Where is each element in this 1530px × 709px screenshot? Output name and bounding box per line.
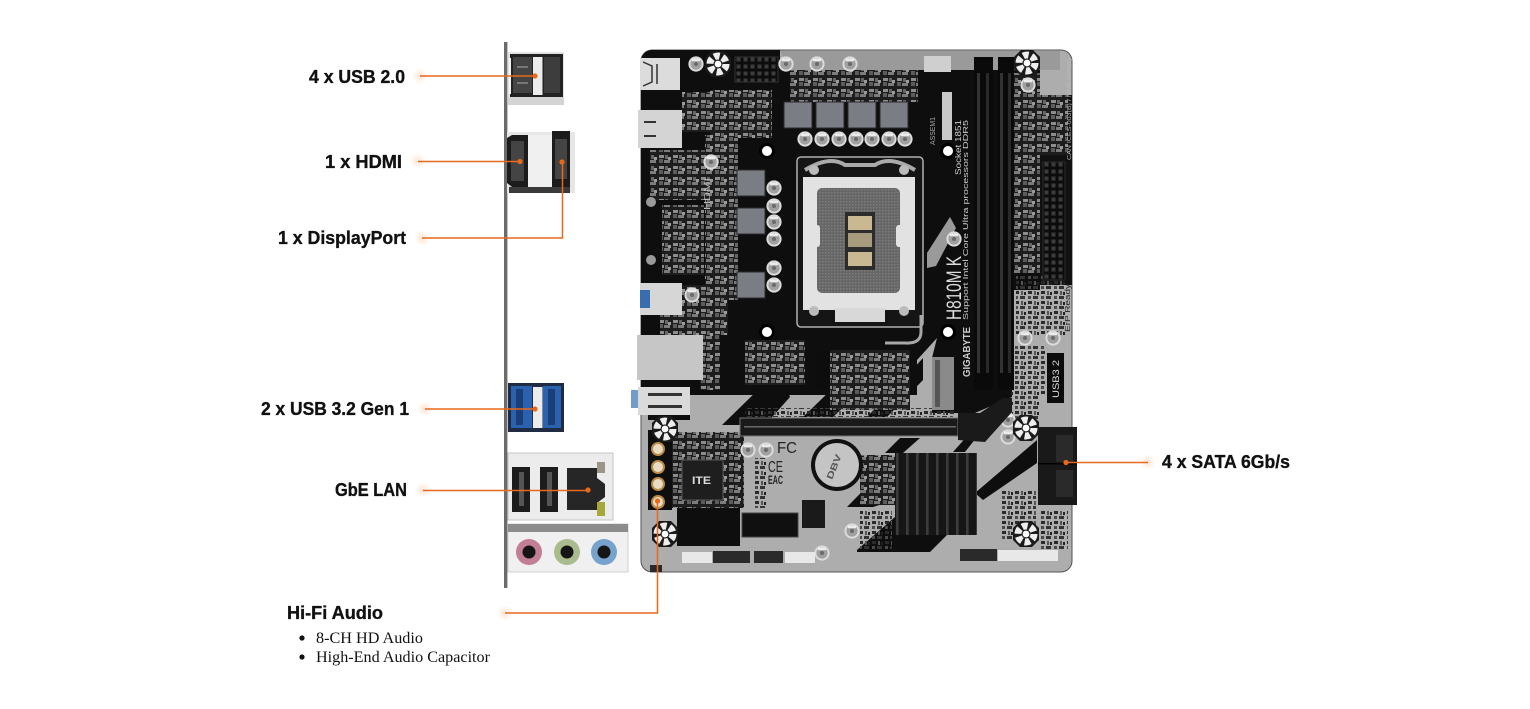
board silkscreen text: HDMI	[703, 178, 712, 210]
icon: HDMI and DisplayPort connectors	[507, 131, 575, 193]
LAN connector on board	[637, 335, 703, 380]
board silkscreen text: USB3 2	[1051, 360, 1061, 398]
falcon logo shape	[927, 217, 956, 268]
label: 4 x SATA 6Gb/s: 4 x SATA 6Gb/s	[1162, 451, 1290, 472]
small white holes	[646, 143, 956, 340]
board silkscreen text: DBV	[825, 453, 844, 481]
chipset heatsink	[895, 453, 977, 535]
fan header	[924, 56, 951, 72]
board silkscreen text	[692, 58, 1073, 487]
black diagonal stripes	[648, 338, 1037, 552]
label: 4 x USB 2.0: 4 x USB 2.0	[309, 66, 405, 87]
label: Hi-Fi Audio with list: 8-CH HD Audio	[316, 630, 423, 647]
USB 3.2 header	[1047, 353, 1064, 403]
label: 2 x USB 3.2 Gen 1: 2 x USB 3.2 Gen 1	[261, 398, 409, 419]
capacitors	[684, 56, 1061, 561]
CMOS battery	[811, 439, 863, 491]
board silkscreen text: ErP Ready	[1063, 284, 1072, 332]
icon: audio jacks panel	[508, 524, 628, 572]
SATA connectors	[1038, 427, 1077, 505]
icon: 2 x USB 3.2 Gen 1 port stack	[508, 383, 564, 432]
label: 1 x DisplayPort	[278, 159, 565, 248]
board silkscreen text: GIGABYTE	[962, 327, 973, 377]
board silkscreen text: EAC	[768, 473, 783, 487]
board silkscreen text: ITE	[692, 475, 711, 487]
board silkscreen text: H810M K	[943, 256, 966, 320]
label: Hi-Fi Audio with list	[287, 498, 660, 666]
board silkscreen text: CAN ICES-003(B) / NMB-003(B)	[1067, 58, 1073, 160]
mounting screw holes	[652, 50, 1040, 547]
label: GbE LAN: GbE LAN	[335, 479, 407, 500]
PCIe x16 slot	[740, 398, 1012, 442]
board base grey lower half	[641, 50, 1072, 572]
board black upper half	[641, 50, 1040, 420]
label: GbE LAN	[335, 479, 591, 500]
board silkscreen text: Support Intel Core Ultra processors DDR5	[961, 120, 970, 320]
M.2 slot	[932, 357, 954, 410]
black right column	[1040, 95, 1072, 285]
board silkscreen text: CE	[768, 459, 783, 476]
label: 4 x USB 2.0	[309, 66, 538, 87]
board silkscreen text: Socket 1851	[953, 120, 963, 175]
dark pin headers	[650, 549, 997, 572]
PCIe x1 slot	[742, 513, 798, 537]
label: 1 x HDMI: 1 x HDMI	[325, 151, 402, 172]
SMD component clusters	[650, 70, 1068, 550]
label: 2 x USB 3.2 Gen 1	[261, 398, 538, 419]
label: Hi-Fi Audio with list: High-End Audio Capacitor	[316, 649, 491, 666]
rear I/O bracket edge	[504, 42, 507, 588]
audio capacitors	[652, 443, 664, 508]
top edge grey strip	[780, 51, 1060, 70]
black band beside M.2 slot	[932, 338, 1012, 413]
ITE chip	[682, 460, 723, 500]
audio connector on board	[631, 387, 690, 415]
label: 1 x HDMI	[325, 151, 523, 172]
USB connector top	[640, 58, 680, 90]
board silkscreen text: FC	[777, 440, 797, 457]
HDMI / DP connector on board	[638, 110, 682, 148]
label: 1 x DisplayPort: 1 x DisplayPort	[278, 227, 406, 248]
DIMM slots	[974, 57, 1014, 390]
white front panel headers	[682, 550, 1058, 563]
USB 3 connector on board	[640, 283, 682, 315]
8-pin power connector	[735, 57, 778, 82]
CPU socket	[797, 157, 923, 343]
icon: USB and RJ45 LAN block	[508, 453, 613, 520]
small chip	[802, 500, 825, 528]
icon: 4 x USB 2.0 port stack	[508, 52, 564, 105]
label: 4 x SATA 6Gb/s	[1063, 451, 1290, 472]
motherboard	[631, 50, 1077, 572]
VRM chokes	[737, 102, 908, 298]
board silkscreen text: ASSEM1	[930, 117, 937, 145]
assembly sticker	[942, 92, 952, 140]
label: Hi-Fi Audio with list: Hi-Fi Audio	[287, 602, 383, 623]
ATX 24-pin connector	[1043, 162, 1065, 280]
